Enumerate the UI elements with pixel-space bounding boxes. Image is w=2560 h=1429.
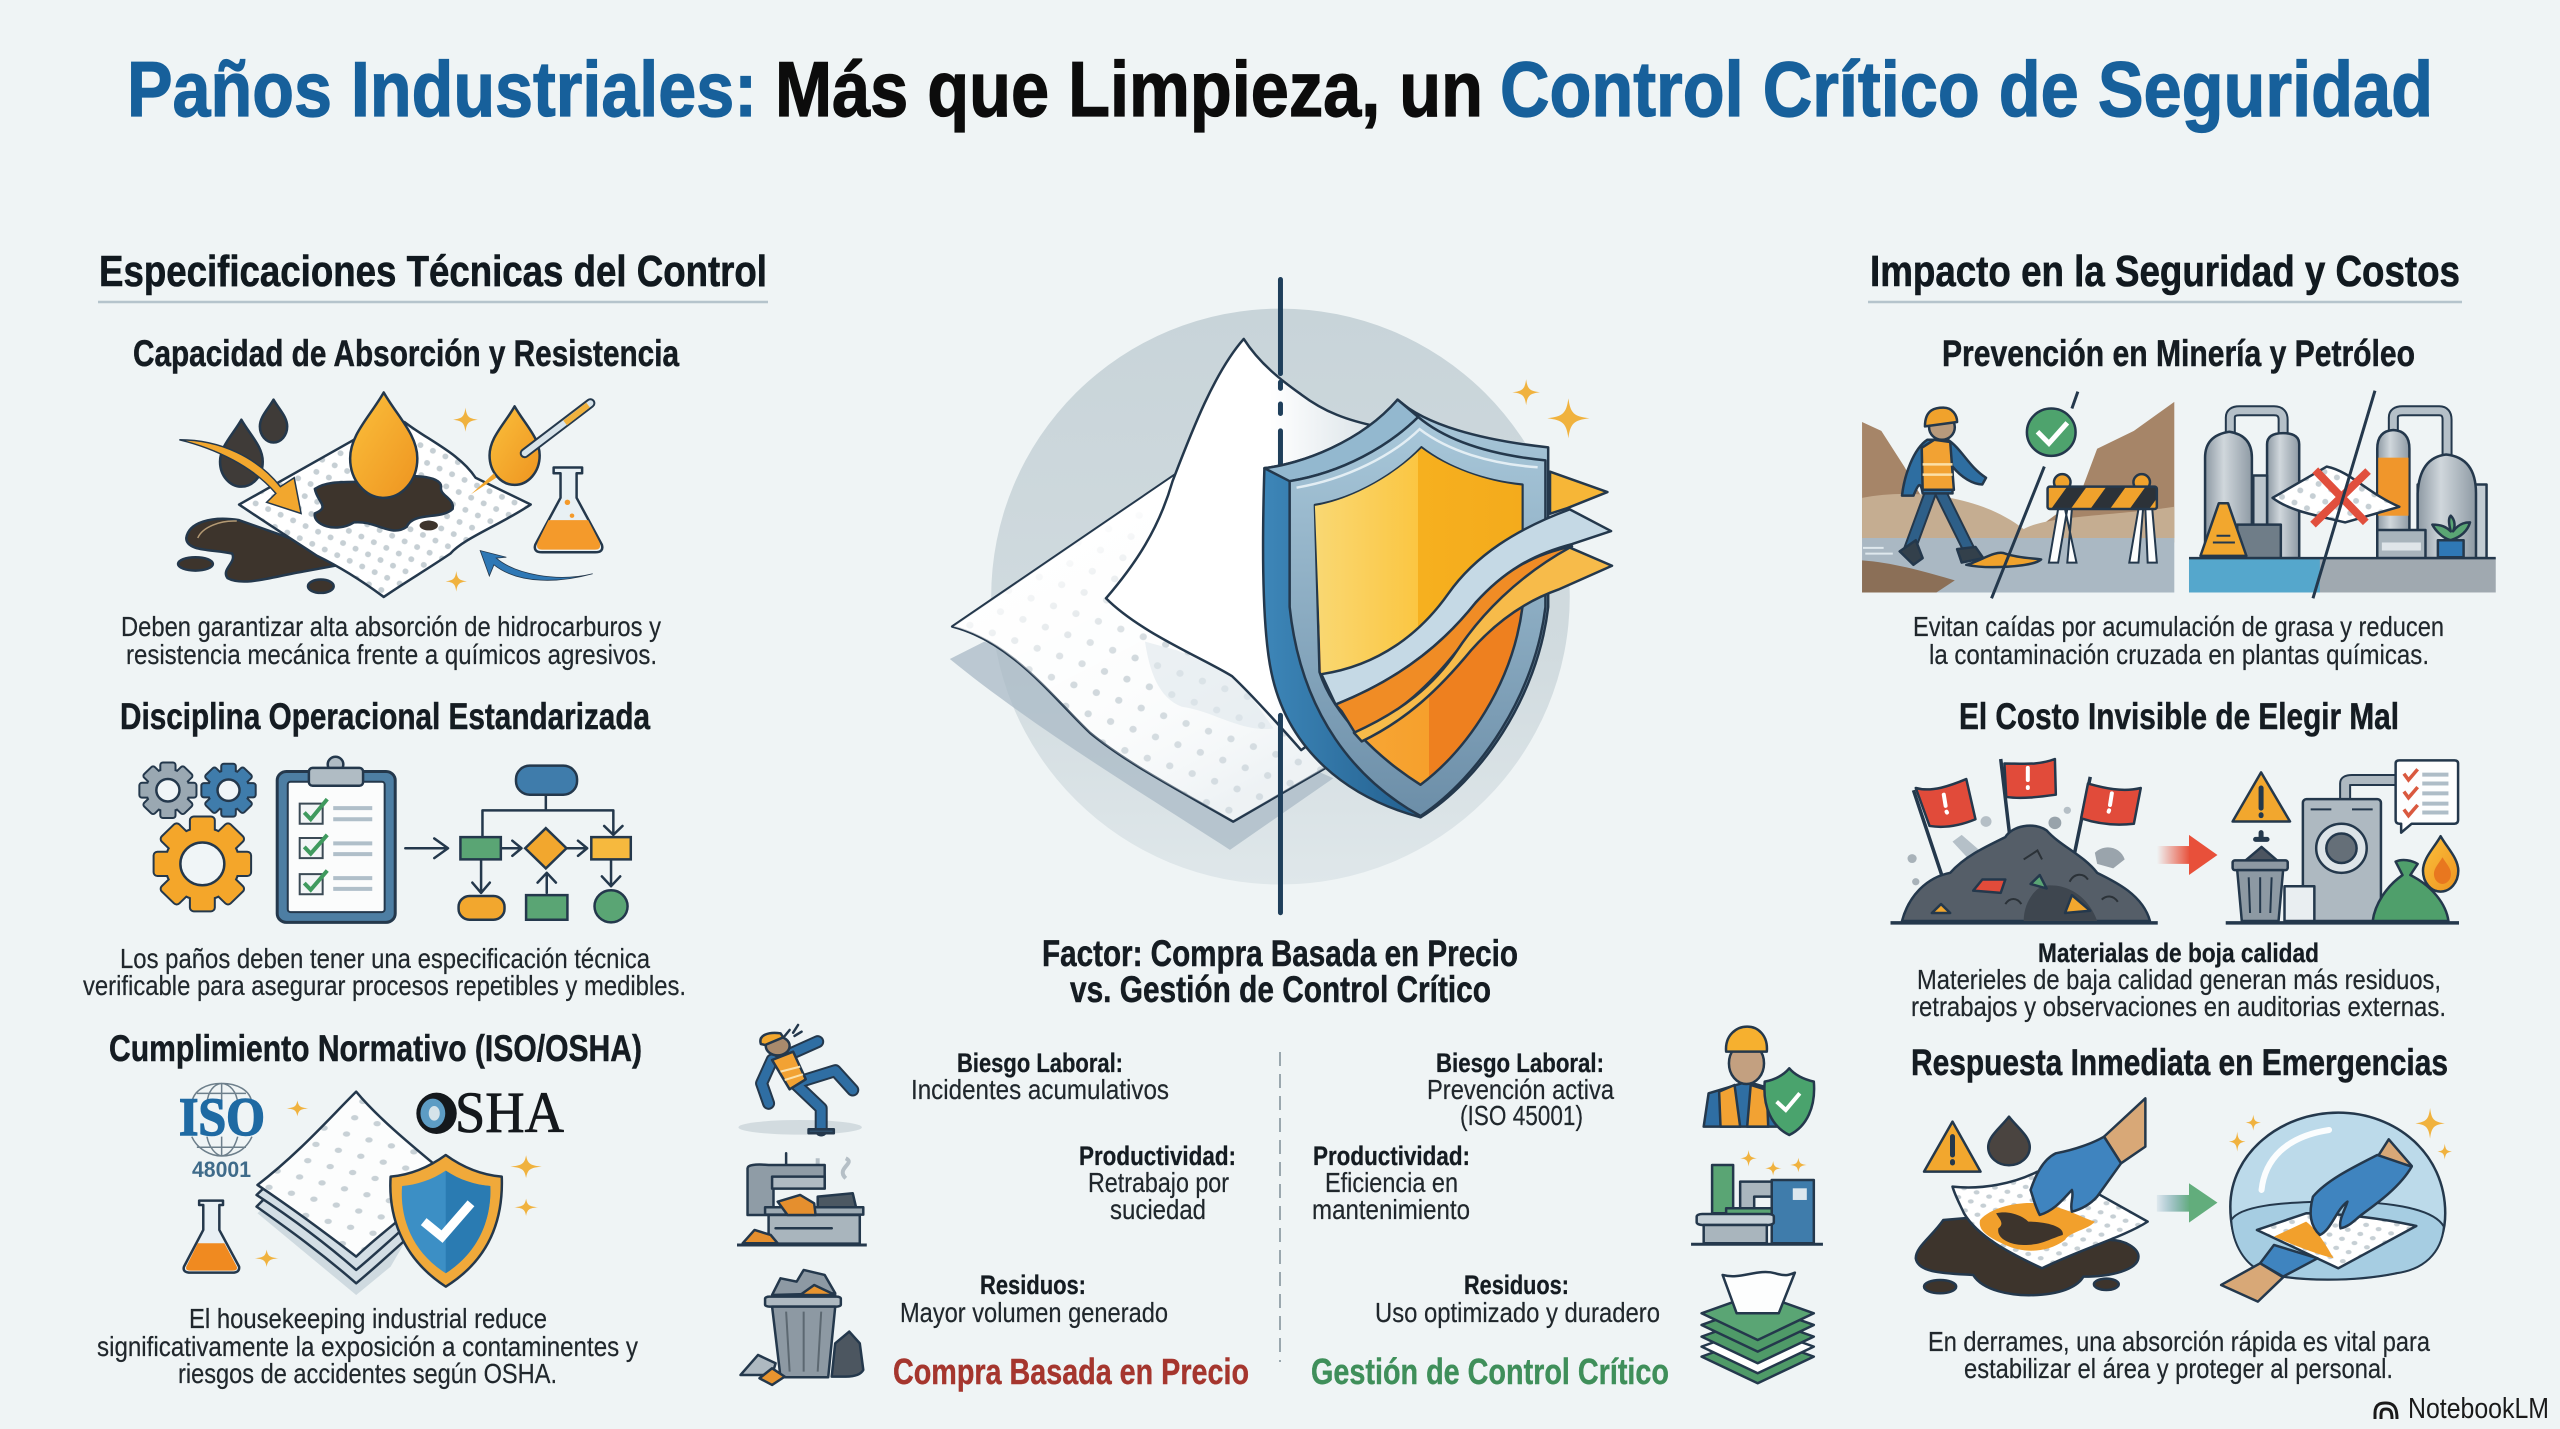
subheading: prevention: Prevención en Minería y Petróleo <box>1942 333 2415 374</box>
text: absorption: resistencia mecánica frente a químicos agresivos. <box>126 639 657 670</box>
subheading: compliance: Cumplimiento Normativo (ISO/OSHA) <box>109 1028 642 1069</box>
text: compliance: El housekeeping industrial reduce <box>189 1303 547 1334</box>
central illustration: cloth transforming into shield <box>950 280 1612 913</box>
panel: safety and costs impact <box>1862 247 2496 1384</box>
icon: ISO and OSHA compliance with cloth and shield: ISO <box>179 1087 265 1147</box>
icon: falling worker <box>738 1025 862 1135</box>
text: labor risk, control <box>1427 1048 1614 1131</box>
icon: clean machine <box>1691 1150 1823 1244</box>
title <box>127 45 2433 133</box>
icon: dirty machine <box>737 1153 867 1245</box>
text: emergency: estabilizar el área y proteger al personal. <box>1964 1353 2393 1384</box>
icon: mining worker scene <box>1862 392 2174 598</box>
text: productivity, control: mantenimiento <box>1312 1194 1470 1225</box>
text: productivity, price: Retrabajo por <box>1088 1167 1229 1198</box>
icon: overflowing trash can <box>741 1270 863 1385</box>
text: discipline: verificable para asegurar procesos repetibles y medibles. <box>83 970 686 1001</box>
cloth <box>952 339 1379 822</box>
comparison heading: Factor: Compra Basada en Precio <box>1042 933 1518 974</box>
text: discipline <box>83 943 686 1001</box>
text: labor risk, control: Biesgo Laboral: <box>1436 1048 1604 1078</box>
title: Control Crítico de Seguridad <box>1500 45 2433 133</box>
shield <box>1263 400 1612 817</box>
text: waste, control <box>1375 1270 1660 1328</box>
arrow: green transition <box>2157 1183 2217 1223</box>
cloth shadow <box>950 642 1333 850</box>
icon: folded cloth stack <box>1702 1272 1814 1383</box>
label: price based purchase: Compra Basada en Precio <box>893 1351 1249 1392</box>
heading: technical specifications: Especificaciones Técnicas del Control <box>99 247 767 296</box>
text: emergency: En derrames, una absorción rápida es vital para <box>1928 1326 2430 1357</box>
icon: ISO and OSHA compliance with cloth and shield <box>179 1080 564 1295</box>
text: labor risk, price: Biesgo Laboral: <box>957 1048 1123 1078</box>
text: prevention: la contaminación cruzada en plantas químicas. <box>1929 639 2429 670</box>
waves <box>1550 472 1607 514</box>
icon: ISO and OSHA compliance with cloth and shield: SHA <box>455 1080 564 1145</box>
text: compliance: significativamente la exposición a contaminentes y <box>97 1331 638 1362</box>
text: productivity, control: Eficiencia en <box>1325 1167 1458 1198</box>
icon: chemical plant scene <box>2189 391 2496 598</box>
heading: impact: Impacto en la Seguridad y Costos <box>1870 247 2460 296</box>
text: compliance <box>97 1303 638 1389</box>
text: invisible cost: Materieles de baja calidad generan más residuos, <box>1917 964 2441 995</box>
text: prevention <box>1913 611 2444 670</box>
divider line <box>1278 280 1283 913</box>
text: productivity, price: suciedad <box>1110 1194 1206 1225</box>
icon: warning, washer, trash and checklist <box>2226 760 2459 923</box>
text: productivity, price <box>1079 1141 1236 1225</box>
subheading: discipline: Disciplina Operacional Estandarizada <box>120 696 650 737</box>
title: Más que Limpieza, un <box>775 45 1483 133</box>
icon: waste pile with red flags <box>1891 759 2217 923</box>
text: invisible cost <box>1911 938 2446 1022</box>
text: waste, price <box>900 1270 1168 1328</box>
text: waste, control: Residuos: <box>1464 1270 1569 1300</box>
text: productivity, price: Productividad: <box>1079 1141 1236 1171</box>
text: labor risk, price: Incidentes acumulativos <box>911 1074 1169 1105</box>
panel: technical specifications <box>83 247 768 1389</box>
text: labor risk, control: Prevención activa <box>1427 1074 1614 1105</box>
text: waste, price: Residuos: <box>980 1270 1086 1300</box>
text: emergency <box>1928 1326 2430 1384</box>
comparison divider <box>1279 1052 1281 1362</box>
icon: absorption cloth with drops <box>178 392 602 597</box>
icon: gears, checklist and flow diagram <box>140 757 631 922</box>
icon: protective dome with gloved hands <box>2221 1108 2452 1302</box>
text: productivity, control <box>1312 1141 1470 1225</box>
text: absorption <box>121 611 661 670</box>
subheading: invisible cost: El Costo Invisible de Elegir Mal <box>1959 696 2399 737</box>
text: invisible cost: retrabajos y observaciones en auditorias externas. <box>1911 991 2446 1022</box>
text: labor risk, price <box>911 1048 1169 1105</box>
backdrop disc <box>991 309 1570 885</box>
icon: protected worker with shield <box>1704 1027 1814 1135</box>
sparkles <box>1512 379 1540 405</box>
subheading: absorption: Capacidad de Absorción y Resistencia <box>133 333 679 374</box>
text: discipline: Los paños deben tener una especificación técnica <box>120 943 650 974</box>
icon: ISO and OSHA compliance with cloth and shield: 48001 <box>192 1157 251 1182</box>
label: critical control management: Gestión de Control Crítico <box>1311 1351 1669 1392</box>
text: invisible cost: Materialas de boja calidad <box>2038 938 2319 968</box>
text: productivity, control: Productividad: <box>1313 1141 1470 1171</box>
title: Paños Industriales: <box>127 45 757 133</box>
icon: gloved hand wiping a spill <box>1916 1098 2148 1295</box>
panel: comparison price vs critical control <box>737 933 1823 1392</box>
text: prevention: Evitan caídas por acumulación de grasa y reducen <box>1913 611 2444 642</box>
text: absorption: Deben garantizar alta absorción de hidrocarburos y <box>121 611 661 642</box>
text: waste, control: Uso optimizado y duradero <box>1375 1297 1660 1328</box>
text: waste, price: Mayor volumen generado <box>900 1297 1168 1328</box>
subheading: emergency: Respuesta Inmediata en Emergencias <box>1911 1042 2448 1083</box>
comparison heading: vs. Gestión de Control Crítico <box>1070 969 1491 1010</box>
text: labor risk, control: (ISO 45001) <box>1460 1100 1583 1131</box>
comparison heading <box>1042 933 1518 1010</box>
text: compliance: riesgos de accidentes según OSHA. <box>178 1358 557 1389</box>
